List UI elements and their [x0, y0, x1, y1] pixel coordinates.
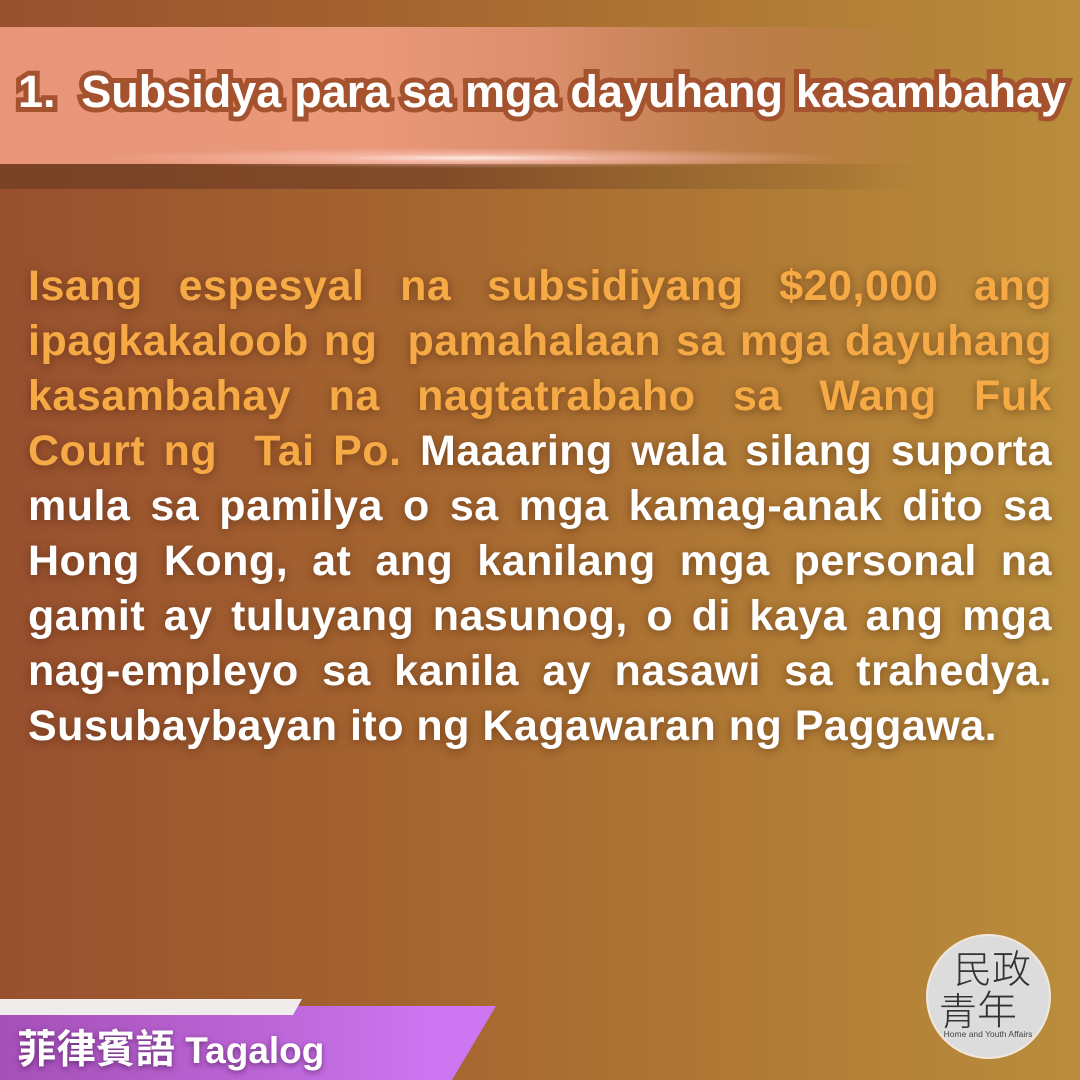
title: 1. Subsidya para sa mga dayuhang kasambahay: [18, 66, 1066, 117]
body text block: gamit ay tuluyang nasunog, o di kaya ang mga: [28, 592, 1052, 640]
body text block: Hong Kong, at ang kanilang mga personal na: [28, 537, 1052, 585]
body text block: kasambahay na nagtatrabaho sa Wang Fuk: [28, 372, 1052, 420]
body text block: ipagkakaloob ng pamahalaan sa mga dayuhang: [28, 317, 1052, 365]
language tab white stripe: [0, 999, 302, 1015]
body text block: Susubaybayan ito ng Kagawaran ng Paggawa.: [28, 702, 997, 750]
logo: 政: [992, 939, 1031, 995]
banner light streak: [30, 146, 910, 170]
title banner: [0, 27, 1080, 164]
logo: Home and Youth Affairs: [944, 1029, 1032, 1039]
body text block: nag-empleyo sa kanila ay nasawi sa trahedya.: [28, 647, 1052, 695]
body text block: mula sa pamilya o sa mga kamag-anak dito sa: [28, 482, 1052, 530]
body text block: Court ng Tai Po. Maaaring wala silang suporta: [28, 427, 1052, 475]
body text block: [26, 262, 1054, 755]
language tab: [0, 1006, 496, 1080]
logo: 青: [939, 981, 977, 1036]
body text block: Isang espesyal na subsidiyang $20,000 ang: [28, 262, 1052, 310]
logo: [926, 934, 1051, 1059]
logo: 年: [977, 978, 1017, 1036]
logo: 民: [954, 939, 992, 994]
language label: 菲律賓語 Tagalog: [17, 1028, 324, 1072]
banner shadow strip: [0, 164, 1080, 189]
